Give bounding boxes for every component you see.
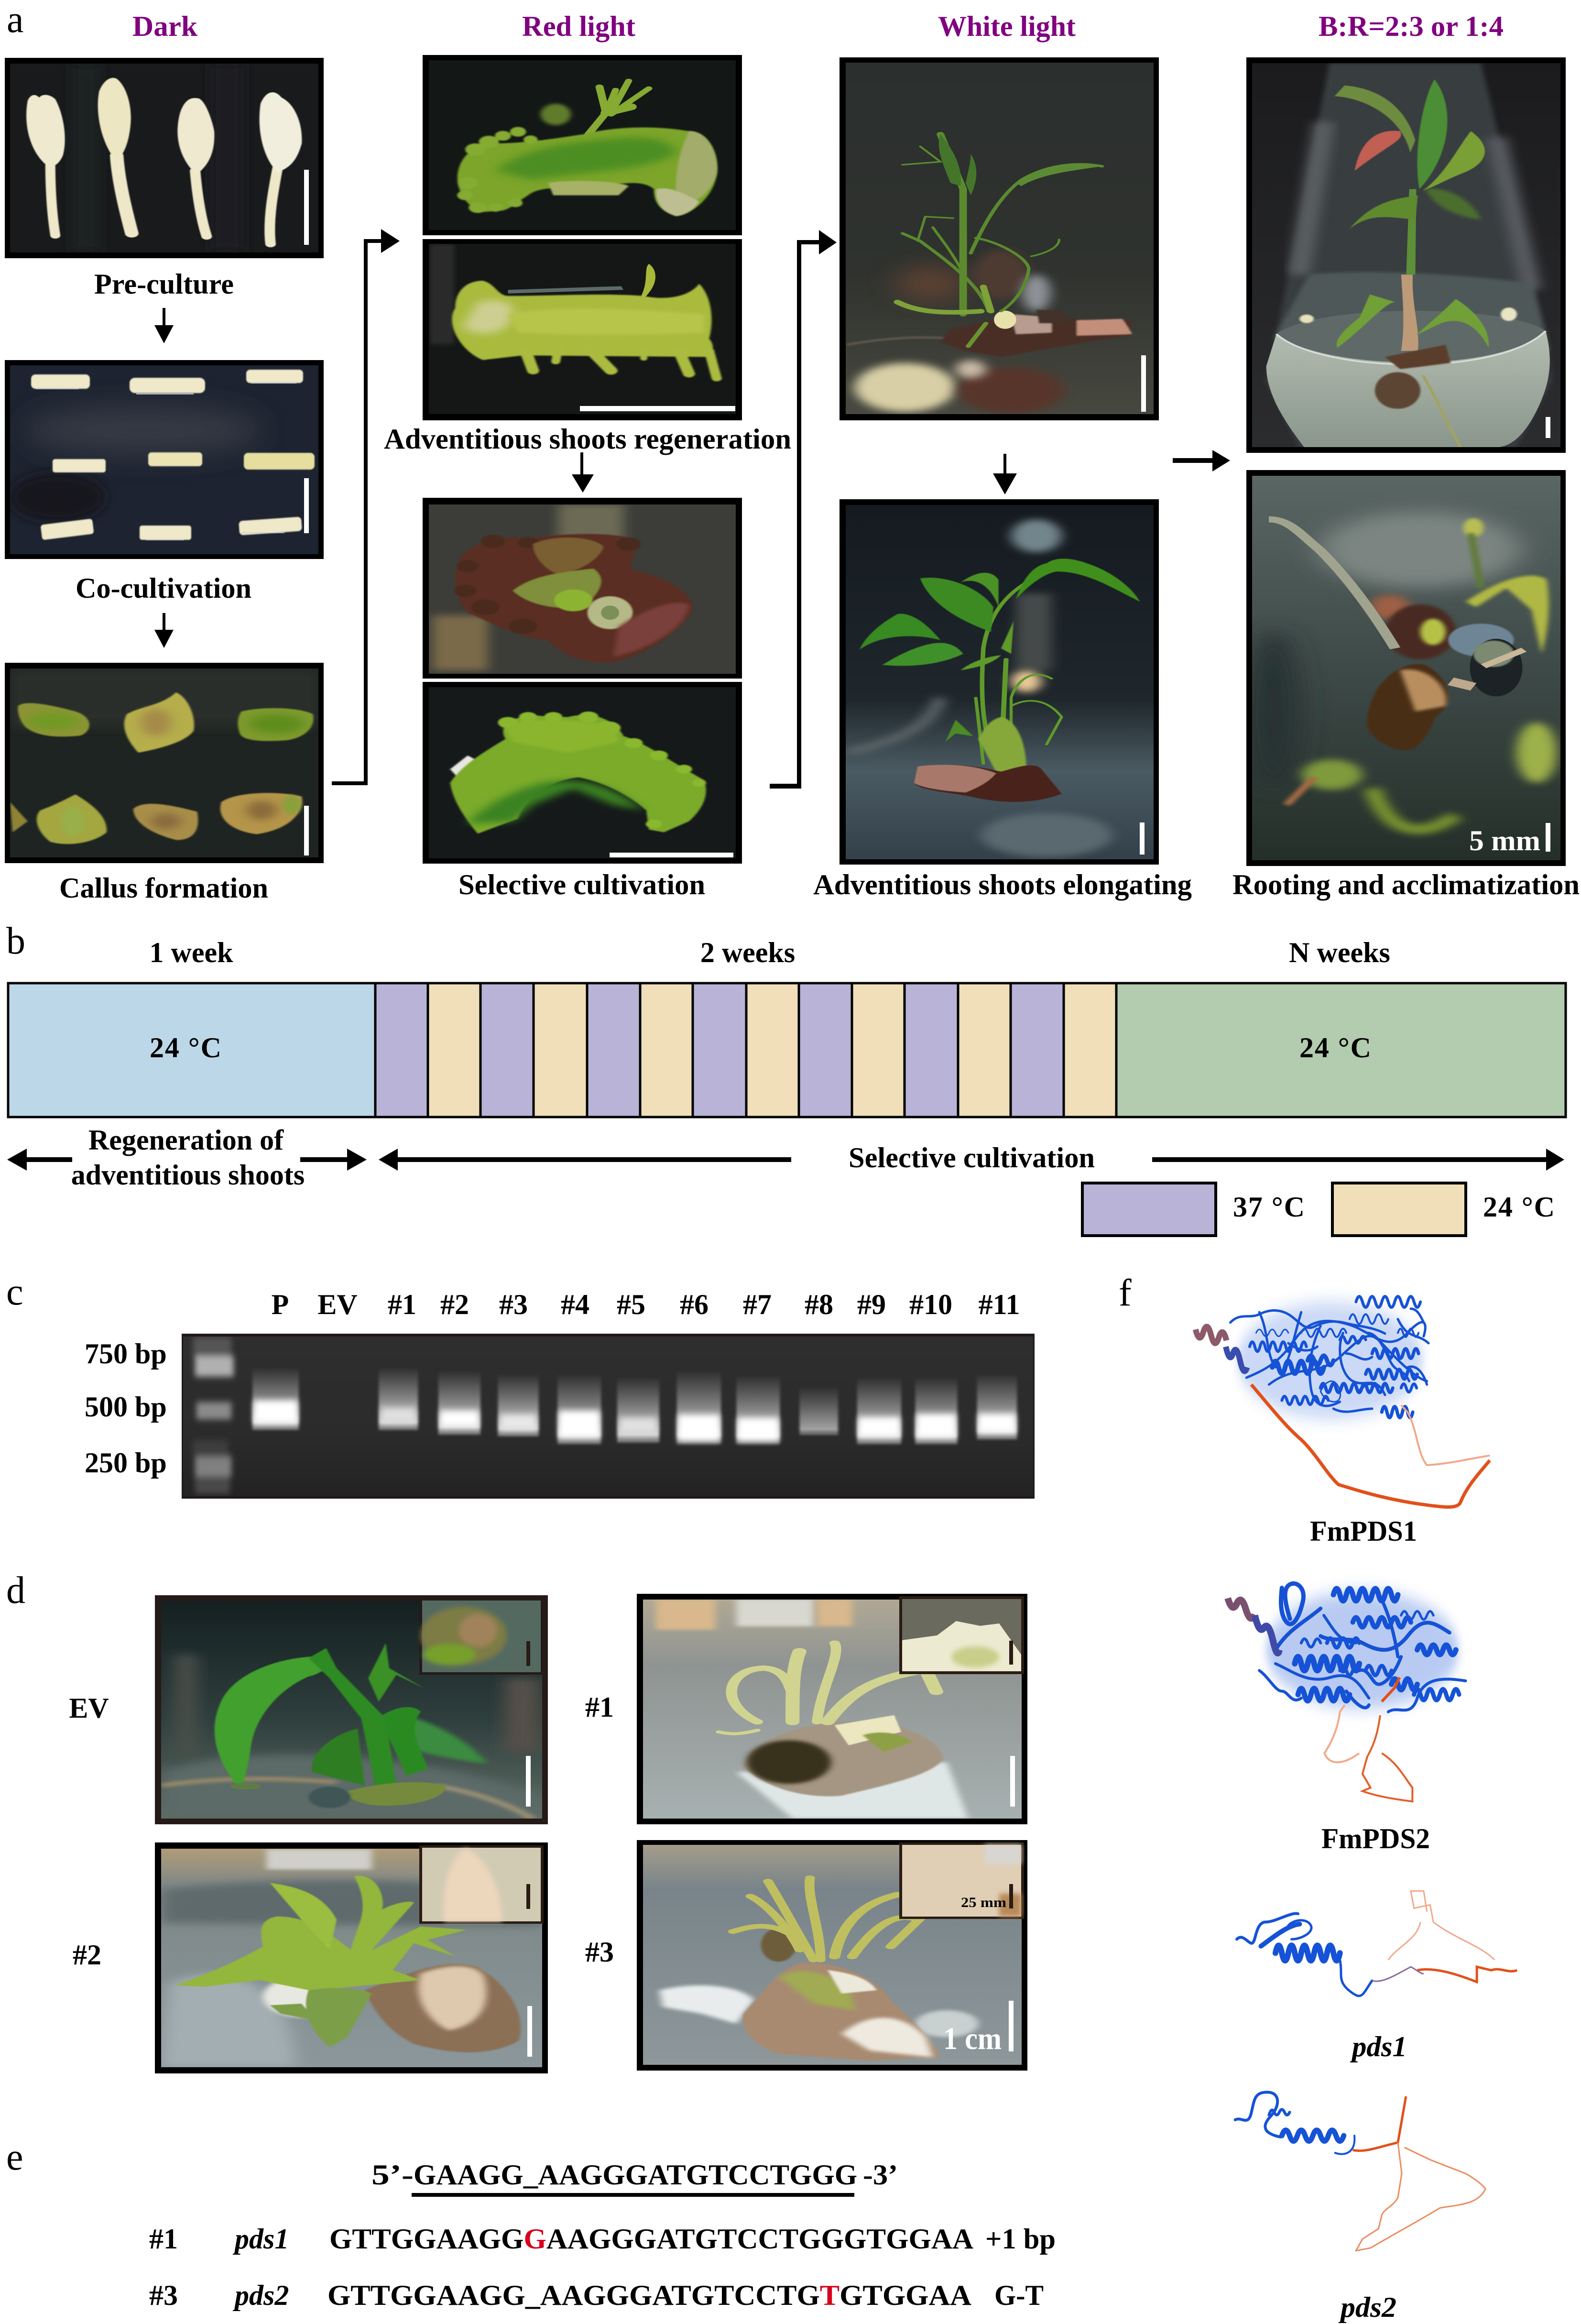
heading: blue to red ratio: B:R=2:3 or 1:4 — [1319, 11, 1504, 42]
photo: selective cultivation green — [423, 682, 742, 864]
heading: Red light: Red light — [522, 11, 635, 42]
panel label: f: f — [1119, 1272, 1132, 1314]
label: Adventitious shoots regeneration: Adventitious shoots regeneration — [384, 423, 791, 455]
gel lane labels: #8 — [805, 1289, 833, 1320]
legend: 24 C — [1332, 1183, 1555, 1236]
label: Callus formation: Callus formation — [59, 872, 268, 904]
scale bar — [526, 1756, 531, 1807]
arrow: regeneration span right — [300, 1149, 367, 1171]
photo: red light shoots upper — [423, 55, 742, 235]
arrow: selective cultivation to white light — [770, 230, 837, 789]
scale bar — [610, 853, 733, 857]
arrow: selective span left — [379, 1149, 791, 1171]
segment: final 24 C — [1116, 983, 1566, 1117]
panel label: b: b — [6, 920, 25, 962]
inset: line 1 callus — [899, 1596, 1024, 1674]
scale bar — [1546, 823, 1550, 852]
label: Selective cultivation: Selective cultivation — [458, 869, 705, 900]
sequence row: #1 pds1: GTTGGAAGGGAAGGGATGTCCTGGGTGGAA — [329, 2223, 973, 2255]
sequence row: #3 pds2: #3 — [149, 2280, 178, 2311]
gel lane labels: #3 — [499, 1289, 528, 1320]
inset: line 2 callus — [419, 1845, 544, 1924]
scale bar — [527, 2006, 532, 2057]
gel size labels: 250 bp — [85, 1447, 167, 1479]
target sequence: GAAGG_AAGGGATGTCCTGGG — [414, 2159, 857, 2191]
arrow: regeneration span left — [7, 1149, 72, 1171]
photo: EV plant — [155, 1595, 548, 1824]
loop — [1353, 2096, 1406, 2151]
gel lane labels: #7 — [743, 1289, 772, 1320]
arrow: selective span right — [1152, 1149, 1564, 1171]
ladder — [193, 1337, 234, 1494]
panel label: d: d — [6, 1569, 25, 1611]
arrow: pre-culture to co-cultivation — [154, 308, 174, 343]
label: Rooting and acclimatization: Rooting and acclimatization — [1232, 869, 1580, 900]
scale bar — [1009, 2001, 1014, 2051]
label: pds1: pds1 — [1350, 2031, 1407, 2062]
label: Regeneration of adventitious shoots: adventitious shoots — [71, 1159, 305, 1191]
scale label: 5 mm — [1469, 825, 1540, 856]
sequence row: #1 pds1: #1 — [149, 2223, 178, 2255]
helix tail — [1196, 1326, 1226, 1343]
scale bar — [1546, 417, 1550, 438]
photo: line 2 shoot — [155, 1842, 548, 2073]
arrow: regeneration to selective cultivation — [572, 452, 594, 493]
photo: pre-culture petals — [5, 58, 324, 258]
protein structure: FmPDS1 — [1196, 1296, 1490, 1507]
label: #1: #1 — [585, 1691, 614, 1723]
panel label: e: e — [6, 2136, 23, 2178]
gel lane labels: EV — [317, 1289, 358, 1320]
gel image — [182, 1334, 1035, 1499]
segment: regeneration 24 C — [8, 983, 375, 1117]
legend: 37 C — [1082, 1183, 1305, 1236]
gel lane labels: #10 — [909, 1289, 952, 1320]
label: Selective cultivation span: Selective cultivation — [849, 1142, 1095, 1173]
gel size labels — [85, 1338, 167, 1479]
thin linker — [1372, 1967, 1424, 1981]
photo: co-cultivation explants — [5, 360, 324, 559]
ribbon — [1417, 1967, 1517, 1982]
label: Regeneration of adventitious shoots — [71, 1124, 305, 1191]
gel lane labels: #2 — [440, 1289, 469, 1320]
target sequence: -3’ — [863, 2159, 898, 2191]
scale bar — [304, 806, 309, 855]
label: N weeks: N weeks — [1289, 937, 1390, 968]
legend: 37 C: 37 °C — [1233, 1191, 1305, 1223]
gel lane labels: P — [272, 1289, 289, 1320]
label: FmPDS2: FmPDS2 — [1321, 1823, 1430, 1854]
scale bar — [1141, 355, 1146, 412]
gel lane labels: #11 — [979, 1289, 1020, 1320]
scale bar — [304, 478, 309, 533]
photo: flask plantlet — [1246, 57, 1566, 453]
label: Co-cultivation: Co-cultivation — [76, 572, 251, 604]
gel lane labels: #5 — [617, 1289, 645, 1320]
timeline bar — [8, 983, 1566, 1117]
protein structure: pds1 — [1237, 1891, 1517, 1996]
sequence row: #3 pds2: GTTGGAAGG_AAGGGATGTCCTG TGTGGAA — [327, 2280, 971, 2311]
inset scale text: 25 mm — [961, 1895, 1006, 1910]
arrow: callus to red light — [332, 229, 400, 785]
label: #3: #3 — [585, 1936, 614, 1968]
scale bar — [580, 406, 735, 411]
photo: rooting and acclimatization — [1246, 470, 1566, 866]
disordered loops — [1324, 1705, 1359, 1762]
label: 2 weeks: 2 weeks — [700, 937, 795, 968]
gel lane labels: #4 — [561, 1289, 589, 1320]
scale bar — [1140, 822, 1145, 855]
photo: line 1 albino shoot — [637, 1594, 1027, 1824]
heading: Dark: Dark — [132, 11, 198, 42]
gel lane labels — [272, 1289, 1020, 1320]
photo: elongating shoot — [840, 499, 1159, 865]
scale bar — [304, 170, 309, 245]
label: Adventitious shoots elongating: Adventitious shoots elongating — [813, 869, 1192, 900]
photo: selective cultivation browned — [423, 498, 742, 679]
scale bar — [1010, 1756, 1015, 1807]
protein structure: pds2 — [1235, 2092, 1485, 2251]
sequence row: #1 pds1: +1 bp — [985, 2223, 1056, 2255]
heading: White light: White light — [938, 11, 1076, 42]
label: 1 week: 1 week — [150, 937, 233, 968]
sequence row: #3 pds2: pds2 — [232, 2280, 289, 2311]
gel lane labels: #9 — [857, 1289, 886, 1320]
target sequence — [371, 2159, 898, 2197]
gel lane labels: #1 — [388, 1289, 416, 1320]
inset: line 3 callus — [899, 1842, 1024, 1919]
scale label: 1 cm — [943, 2021, 1002, 2056]
label: Regeneration of adventitious shoots: Regeneration of — [88, 1124, 284, 1156]
panel label: c: c — [6, 1271, 23, 1313]
label: FmPDS1: FmPDS1 — [1310, 1515, 1417, 1547]
legend: 24 C: 24 °C — [1483, 1191, 1555, 1223]
protein structure: FmPDS2 — [1228, 1583, 1466, 1801]
gel size labels: 750 bp — [85, 1338, 167, 1370]
arrow: elongation to rooting — [1173, 450, 1230, 471]
gel lane labels: #6 — [680, 1289, 709, 1320]
target sequence: 5’- — [371, 2159, 414, 2191]
inset: EV callus — [419, 1599, 544, 1675]
arrow: co-cultivation to callus — [154, 613, 174, 648]
disordered ribbon — [1251, 1384, 1490, 1507]
photo: red light shoots lower — [423, 239, 742, 420]
sequence row: #1 pds1: pds1 — [232, 2223, 289, 2255]
gel size labels: 500 bp — [85, 1391, 167, 1423]
label: 24 C left: 24 °C — [150, 1032, 221, 1063]
label: pds2: pds2 — [1338, 2291, 1396, 2323]
sequence row: #3 pds2: G-T — [994, 2280, 1044, 2311]
photo: callus formation — [5, 663, 324, 863]
bands — [252, 1367, 1017, 1447]
label: Pre-culture: Pre-culture — [94, 268, 234, 300]
label: 24 C right: 24 °C — [1299, 1032, 1371, 1063]
helix tail — [1228, 1598, 1255, 1619]
arrow: white light to elongation — [993, 454, 1017, 494]
label: EV: EV — [69, 1692, 109, 1724]
label: #2: #2 — [73, 1939, 101, 1971]
photo: white light shoot — [840, 57, 1159, 420]
photo: line 3 shoot — [637, 1840, 1027, 2071]
